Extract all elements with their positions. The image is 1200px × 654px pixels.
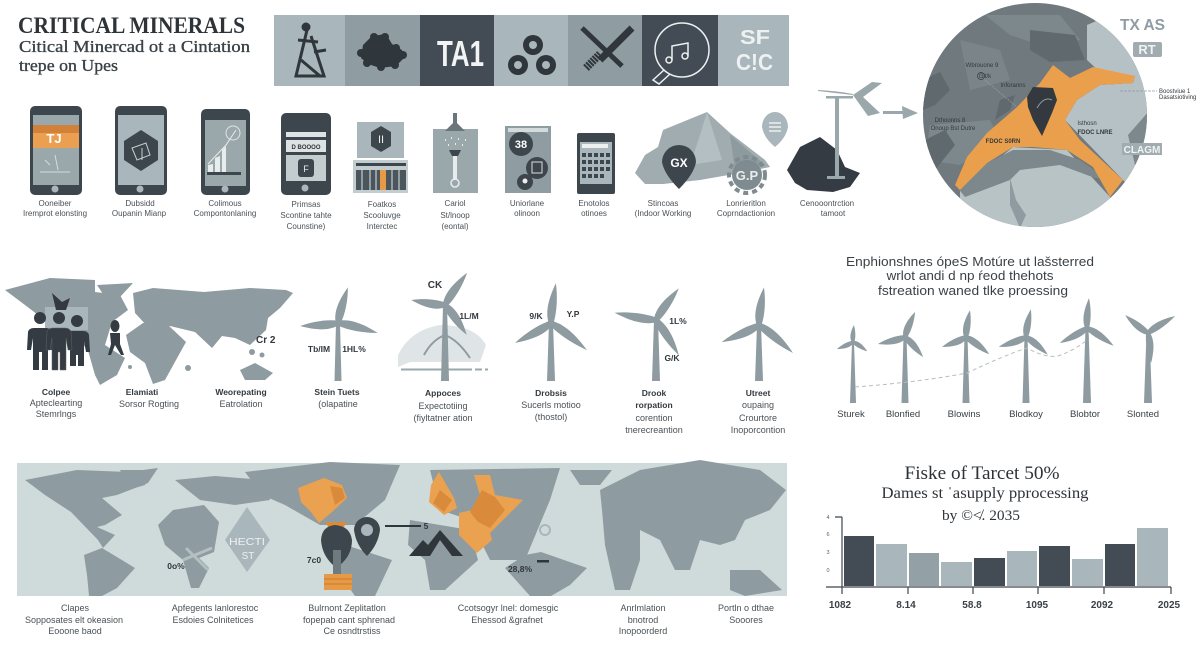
panel: circular regional map (920, 0, 1196, 230)
turbine labels: Blodkoy (1009, 409, 1043, 420)
text block: device captions: Ooneiber (39, 199, 72, 208)
heading: right turbine chart: fstreation waned tlke proessing (878, 283, 1068, 298)
turbine labels: Slonted (1127, 409, 1159, 420)
icon: furnace (321, 522, 352, 590)
text block: device captions: Scontine tahte (280, 211, 332, 220)
map value labels: 5 (424, 521, 429, 531)
text block: device captions: (eontal) (441, 222, 469, 231)
icon: mountain with badges (635, 112, 788, 193)
arrow to map (883, 106, 918, 119)
icon: turbine two (411, 270, 471, 381)
icon: turbine R6 (1123, 312, 1177, 403)
text block: device captions: Enotolos (578, 199, 610, 208)
turbine labels: Blowins (948, 409, 981, 420)
heading: right turbine chart: Enphionshnes ópeS Motúre ut lašsterred (846, 254, 1094, 269)
turbine value labels: 1L/M (459, 311, 479, 321)
turbine labels: Blonfied (886, 409, 920, 420)
heading: right turbine chart (846, 254, 1094, 298)
icon: phone two (115, 106, 167, 195)
map labels (931, 63, 1112, 145)
map texture (923, 15, 1085, 170)
icon: drill tool (582, 28, 632, 68)
text block: row two captions: Sucerls motioo (521, 400, 581, 410)
text block: device captions: tamoot (821, 209, 846, 218)
text block: bottom captions: Ce osndtrstiss (323, 626, 381, 636)
icon: tablet with badges (505, 126, 551, 193)
text block: row two captions: oupaing (742, 400, 774, 410)
callout: right annotation (1120, 89, 1196, 101)
turbine value labels: 1HL% (342, 344, 366, 354)
text block: device captions: St/lnoop (440, 211, 470, 220)
heading: right turbine chart: wrlot andi d np ŕeod thehots (885, 268, 1054, 283)
icon: landscape behind turbine two (398, 325, 486, 367)
panel: mineral icon band (274, 15, 789, 86)
map land (25, 460, 786, 596)
map labels: Wbrouone 9 (966, 63, 999, 69)
icon: phone four: D BOOOO (291, 145, 321, 151)
map value labels: 0o% (167, 561, 185, 571)
text block: device captions: Cenooontrction (800, 199, 854, 208)
title: CRITICAL MINERALS (18, 13, 245, 38)
icon: phone one (30, 106, 82, 195)
icon: speech bubble (762, 112, 788, 147)
turbine value labels: CK (428, 280, 443, 291)
icon: X crossing (183, 548, 212, 570)
orange region (955, 65, 1135, 197)
icon: wind vane tower (818, 82, 882, 179)
text block: bottom captions: Inopoorderd (619, 626, 667, 636)
icon: turbine R1 (836, 325, 869, 403)
x axis labels: 1082 (829, 600, 852, 611)
text block: bottom captions: Esdoies Colnitetices (172, 615, 254, 625)
text block: device captions: Foatkos (368, 200, 396, 209)
badge: diamond HECTI ST: ST (242, 551, 254, 562)
icon: turbine R5 (1058, 298, 1116, 403)
badge: RT: RT (1138, 42, 1156, 57)
text block: bottom captions (25, 603, 774, 636)
text block: device captions: Uniorlane (510, 199, 545, 208)
text block: device captions: Dubsidd (125, 199, 155, 208)
panel: turbine row (300, 270, 796, 381)
map labels: Glt/k (979, 74, 992, 80)
label: TXAS: TX AS (1120, 17, 1165, 34)
text block: row two captions: Crourtore (739, 413, 777, 423)
icon: location pin (354, 517, 380, 556)
turbine value labels: Y.P (567, 309, 580, 319)
text block: bottom captions: Ehessod &grafnet (471, 615, 543, 625)
icon: gear badge (729, 157, 765, 193)
x axis labels: 58.8 (962, 600, 982, 611)
text block: device captions: Colimous (208, 199, 242, 208)
y axis labels: 4 (826, 515, 830, 521)
icon: storage device (353, 122, 408, 193)
icon: SF CC letters (736, 27, 773, 75)
subtitle line one: Citical Minercad ot a Cintation (19, 37, 251, 56)
label: Cr 2: Cr 2 (256, 335, 276, 346)
icon: mineral ore cluster (357, 33, 407, 71)
text block: device captions: Scooluvge (363, 211, 401, 220)
y axis labels: 3 (826, 550, 830, 556)
text block: device captions: Interctec (367, 222, 397, 231)
icon: ring marker (540, 525, 550, 535)
orange regions (298, 472, 523, 553)
icon: map pin badge (662, 145, 696, 189)
text block: row two captions: Drook (642, 388, 667, 398)
text block: device captions: Primsas (292, 200, 320, 209)
icon: TA1 letters: TA1 (437, 33, 484, 74)
text block: bottom captions: Bulrnont Zeplitatlon (308, 603, 386, 613)
map value labels: 7c0 (307, 555, 321, 565)
text block: bottom captions: Apfegents lanlorestoc (172, 603, 259, 613)
chart heading: by ©≮. 2035 (942, 508, 1020, 524)
icon: map pin badge: GX (670, 156, 688, 170)
map value labels: 28,8% (508, 564, 532, 574)
badge: diamond HECTI ST (225, 507, 270, 572)
text block: row two captions: (olapatine (318, 399, 358, 409)
chart heading: Dames st ˈasupply pprocessing (882, 485, 1089, 502)
turbine value labels: Tb/IM (308, 344, 330, 354)
bars (844, 528, 1168, 586)
text block: device captions: Stincoas (648, 199, 678, 208)
text block: row two captions: Elamiati (126, 387, 158, 397)
text block: bottom captions: Sopposates elt okeasion (25, 615, 123, 625)
icon: tripod tool (296, 24, 326, 76)
text block: bottom captions: Eooone baod (48, 626, 102, 636)
map value labels (167, 521, 532, 574)
chart: turbine growth (836, 298, 1177, 420)
text block: bottom captions: Ccotsogyr lnel: domesgic (458, 603, 559, 613)
map labels: FDOC LNRE (1078, 130, 1112, 136)
badge: CLAGM: CLAGM (1124, 145, 1160, 156)
icon: turbine R2 (877, 310, 926, 403)
y axis labels: 6 (826, 532, 830, 538)
icon: SF CC letters: SF (740, 27, 770, 49)
x axis labels: 8.14 (896, 600, 916, 611)
text block: device captions: otinoes (581, 209, 607, 218)
icon: turbine four (614, 285, 683, 381)
map labels: FDOC S0RN (986, 139, 1020, 145)
icon: phone four: F (303, 164, 309, 174)
dark rock marker (1027, 87, 1057, 136)
turbine value labels: 9/K (529, 311, 543, 321)
text block: row two captions: Eatrolation (219, 399, 263, 409)
text block: row two captions: Colpee (42, 387, 70, 397)
icon: turbine R4 (998, 309, 1050, 403)
text block: row two captions: Drobsis (535, 388, 567, 398)
pointer line (385, 525, 421, 527)
text block: bottom captions: bnotrod (628, 615, 658, 625)
axes (826, 517, 1171, 594)
text block: device captions: Lonrieritlon (726, 199, 766, 208)
pale right region (1065, 21, 1147, 182)
chart heading: Fiske of Tarcet 50% (904, 463, 1060, 484)
text block: row two captions: Stein Tuets (314, 387, 360, 397)
text block: device captions (23, 199, 854, 231)
text block: device captions: Compontonlaning (194, 209, 256, 218)
text block: device captions: olinoon (514, 209, 540, 218)
y axis labels: 0 (826, 568, 830, 574)
text block: device captions: Coprndactionion (717, 209, 775, 218)
text block: row two captions: Expectotiing (418, 401, 468, 411)
callout: right annotation: Boostviue 1 (1159, 89, 1191, 95)
icon: phone four (281, 113, 331, 195)
icon: turbine five (720, 287, 796, 381)
chart heading (882, 463, 1089, 524)
map labels: Onoup Bst Dutre (931, 126, 976, 132)
map labels: Inforanns (1000, 83, 1026, 89)
text block: row two captions: rorpation (635, 400, 673, 410)
text block: row two captions: Weorepating (215, 387, 267, 397)
text block: row two captions: Inoporcontion (731, 425, 785, 435)
map labels: Dthoonns 8 (935, 118, 966, 124)
icon: turbine one (300, 286, 379, 381)
y axis labels (826, 515, 830, 574)
icon: turbine R3 (941, 310, 992, 403)
callout: right annotation: Dasatsiotiving (1159, 95, 1196, 101)
icon: calculator device (577, 133, 615, 194)
turbine value labels (308, 280, 687, 363)
text block: row two captions: corention (635, 413, 673, 423)
icon: lone person (108, 320, 124, 355)
icon: turbine three (513, 283, 590, 381)
turbine value labels: G/K (664, 353, 680, 363)
icon: magnifier with music note (653, 23, 709, 84)
icon: phone one: TJ (46, 131, 62, 146)
text block: row two captions: (fiyltatner ation (413, 413, 473, 423)
bar chart (826, 515, 1181, 611)
text block: row two captions (30, 387, 785, 435)
title block (18, 13, 251, 75)
icon: gear badge: G.P (736, 168, 759, 183)
x axis labels (829, 600, 1181, 611)
icon: group of people (27, 312, 124, 370)
text block: device captions: Counstine) (287, 222, 326, 231)
panel: device icon row (30, 106, 788, 195)
turbine labels: Blobtor (1070, 409, 1100, 420)
text block: bottom captions: Anrlmlation (620, 603, 666, 613)
text block: device captions: (Indoor Working (635, 209, 691, 218)
icon: gears (508, 35, 556, 75)
icon: storage device: II (378, 134, 384, 146)
trend line (855, 340, 1087, 387)
badge: diamond HECTI ST: HECTI (229, 537, 265, 548)
turbine value labels: 1L% (669, 316, 687, 326)
badge: RT (1133, 42, 1162, 57)
text block: device captions: Cariol (445, 199, 466, 208)
text block: row two captions: Sorsor Rogting (119, 399, 179, 409)
text block: row two captions: Appoces (425, 388, 461, 398)
panel: bottom world map (17, 460, 787, 596)
icon: coal rock (787, 137, 860, 192)
map labels: Isthosn (1077, 121, 1097, 127)
text block: row two captions: (thostol) (535, 412, 567, 422)
panel: world map with people (5, 278, 293, 385)
text block: bottom captions: Clapes (61, 603, 90, 613)
world map land (5, 278, 293, 385)
icon: thermometer panel (433, 113, 478, 193)
x axis labels: 2025 (1158, 600, 1181, 611)
icon: wedge marker (52, 293, 70, 310)
icon: phone three with chart (201, 109, 250, 195)
icon: SF CC letters: C!C (736, 49, 773, 75)
turbine labels: Sturek (837, 409, 865, 420)
text block: row two captions: Stemrlngs (36, 409, 77, 419)
text block: bottom captions: Portln o dthae (718, 603, 774, 613)
text block: device captions: Iremprot elonsting (23, 209, 87, 218)
icon: ground strip (401, 368, 488, 370)
icon: tablet with badges: 38 (515, 139, 527, 151)
text block: bottom captions: fopepab cant sphrenad (303, 615, 395, 625)
text block: row two captions: Utreet (746, 388, 770, 398)
text block: device captions: Oupanin Mianp (112, 209, 167, 218)
text block: row two captions: Apteclearting (30, 398, 82, 408)
text block: row two captions: tnerecreantion (625, 425, 683, 435)
x axis labels: 1095 (1026, 600, 1049, 611)
subtitle line two: trepe on Upes (19, 56, 118, 75)
text block: bottom captions: Sooores (729, 615, 763, 625)
lower light region (960, 147, 1110, 230)
turbine labels (837, 409, 1159, 420)
icon: mountain (409, 530, 463, 556)
x axis labels: 2092 (1091, 600, 1114, 611)
